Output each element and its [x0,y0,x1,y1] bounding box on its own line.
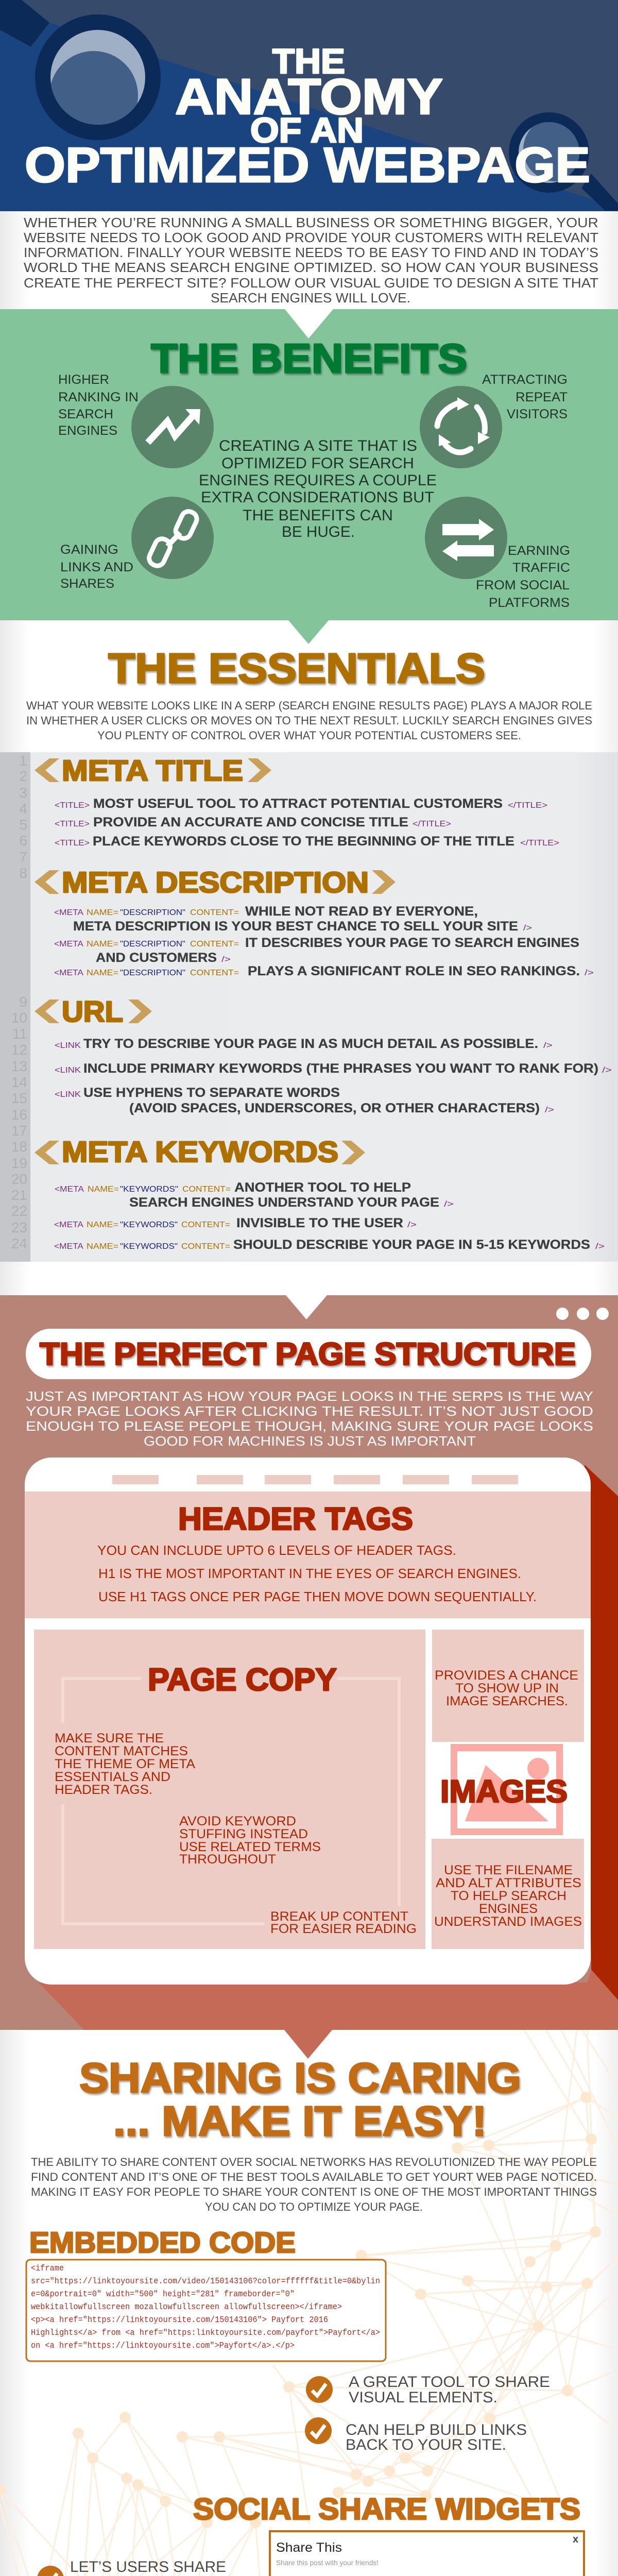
code box: Highlights</a> from <a href="https:linktoyoursite.com/payfort">Payfort</a> [31,2328,380,2338]
intro text: WORLD THE MEANS SEARCH ENGINE OPTIMIZED. SO HOW CAN YOUR BUSINESS [24,260,598,275]
meta description items: AND CUSTOMERS [96,951,217,965]
panel: page copy: ESSENTIALS AND [55,1770,170,1784]
meta title items: </TITLE> [508,801,547,810]
meta title items: </TITLE> [520,839,559,848]
meta title items: <TITLE> [55,820,90,828]
bullet: users share: LET’S USERS SHARE [70,2558,226,2575]
panel: the essentials intro [0,620,618,752]
meta description items: CONTENT= [190,969,239,977]
panel: images bottom text: ENGINES [479,1902,538,1916]
intro text: SEARCH ENGINES WILL LOVE. [211,290,410,306]
meta keywords items: ANOTHER TOOL TO HELP [234,1180,411,1195]
meta keywords items: NAME= [87,1242,118,1251]
meta keywords items: /> [444,1200,454,1209]
meta keywords items: <META [55,1185,84,1194]
benefit: social traffic: PLATFORMS [489,596,570,610]
line numbers: 20 [11,1171,27,1187]
intro text: WEBSITE NEEDS TO LOOK GOOD AND PROVIDE YOUR CUSTOMERS WITH RELEVANT [24,230,598,245]
meta description items: NAME= [87,940,118,948]
meta description items: /> [523,924,532,933]
code box: <iframe [31,2264,64,2274]
benefits centre text: THE BENEFITS CAN [243,507,393,524]
meta keywords items: "KEYWORDS" [120,1221,178,1229]
panel: page copy: THE THEME OF META [55,1757,195,1771]
bullet: build links [305,2417,527,2453]
line numbers: 18 [11,1139,27,1155]
meta keywords items: NAME= [87,1221,118,1229]
benefit: social traffic: EARNING [508,544,570,558]
benefit: higher ranking: HIGHER [58,372,109,387]
meta title items: </TITLE> [413,820,451,828]
line numbers: 10 [11,1010,27,1026]
line numbers: 14 [11,1074,27,1090]
meta description items: "DESCRIPTION" [120,940,185,948]
benefit: social traffic [425,497,570,610]
essentials text [26,699,592,742]
code box: src="https://linktoyoursite.com/video/150143106?color=ffffff&title=0&bylin [31,2277,380,2286]
spacer band [0,1262,618,1295]
meta keywords items: /> [407,1221,417,1229]
meta keywords items: SHOULD DESCRIBE YOUR PAGE IN 5-15 KEYWORDS [233,1238,590,1252]
line numbers: 11 [12,1026,27,1042]
meta title items: PROVIDE AN ACCURATE AND CONCISE TITLE [93,815,408,829]
window dots [556,1308,609,1320]
heading: url: URL [62,995,123,1028]
meta description items: NAME= [87,908,118,917]
essentials text: WHAT YOUR WEBSITE LOOKS LIKE IN A SERP (SEARCH ENGINE RESULTS PAGE) PLAYS A MAJOR ROLE [26,699,592,712]
sharing text: FIND CONTENT AND IT’S ONE OF THE BEST TOOLS AVAILABLE TO GET YOURT WEB PAGE NOTICED. [31,2171,597,2183]
heading: meta description: META DESCRIPTION [62,866,369,899]
heading pill: the perfect page structure: THE PERFECT PAGE STRUCTURE [40,1336,576,1371]
benefits centre text: ENGINES REQUIRES A COUPLE [199,472,437,489]
bullet: great tool: VISUAL ELEMENTS. [349,2389,497,2406]
panel: sharing is caring [0,2030,618,2576]
bullet: build links: CAN HELP BUILD LINKS [346,2421,527,2438]
meta description items: META DESCRIPTION IS YOUR BEST CHANCE TO SELL YOUR SITE [73,919,518,934]
meta title items: <TITLE> [55,801,90,810]
heading: sharing is caring: ... MAKE IT EASY! [113,2098,487,2145]
heading: url [35,995,152,1028]
line numbers: 6 [19,833,27,849]
url items: TRY TO DESCRIBE YOUR PAGE IN AS MUCH DETAIL AS POSSIBLE. [83,1037,538,1051]
share widget: x [573,2534,578,2545]
url items [55,1037,612,1115]
line numbers: 16 [11,1107,27,1123]
panel: images top text: TO SHOW UP IN [455,1681,559,1696]
heading: the benefits: THE BENEFITS [151,335,467,381]
url items: INCLUDE PRIMARY KEYWORDS (THE PHRASES YOU WANT TO RANK FOR) [83,1061,598,1076]
intro text: WHETHER YOU’RE RUNNING A SMALL BUSINESS OR SOMETHING BIGGER, YOUR [24,215,598,230]
meta description items: <META [54,908,83,917]
structure intro text: ENOUGH TO PLEASE PEOPLE THOUGH, MAKING SURE YOUR PAGE LOOKS [26,1418,593,1434]
line numbers: 22 [11,1203,27,1219]
url items: /> [602,1066,612,1075]
sharing text: THE ABILITY TO SHARE CONTENT OVER SOCIAL NETWORKS HAS REVOLUTIONIZED THE WAY PEOPLE [31,2156,597,2168]
meta description items: "DESCRIPTION" [120,908,185,917]
benefit: repeat visitors: REPEAT [516,390,568,404]
panel: code editor essentials [0,752,618,1262]
browser window [25,1458,591,1985]
code box [26,2260,386,2361]
line numbers: 4 [19,801,27,817]
meta title items: MOST USEFUL TOOL TO ATTRACT POTENTIAL CUSTOMERS [93,796,503,811]
nav bar blocks [112,1475,518,1484]
panel: page copy: PAGE COPY [148,1662,337,1697]
meta keywords items: <META [54,1242,83,1251]
meta keywords items: SEARCH ENGINES UNDERSTAND YOUR PAGE [129,1195,439,1210]
code box: on <a href="https://linktoyoursite.com">Payfort</a>.</p> [31,2341,295,2351]
heading pill: the perfect page structure [26,1329,591,1379]
sharing text: YOU CAN DO TO OPTIMIZE YOUR PAGE. [205,2200,423,2213]
panel: header tags: YOU CAN INCLUDE UPTO 6 LEVELS OF HEADER TAGS. [97,1543,456,1558]
benefit: higher ranking [58,372,214,468]
bullet: great tool [306,2374,550,2406]
meta description items: CONTENT= [190,908,239,917]
sharing text [31,2156,597,2213]
url items: <LINK [55,1041,81,1050]
meta keywords items: INVISIBLE TO THE USER [236,1216,403,1230]
panel: introduction [0,211,618,309]
panel: header tags: H1 IS THE MOST IMPORTANT IN THE EYES OF SEARCH ENGINES. [98,1566,521,1581]
icon: magnifying glass right [509,112,618,211]
header banner [0,0,618,211]
url items: (AVOID SPACES, UNDERSCORES, OR OTHER CHARACTERS) [129,1101,540,1115]
line numbers [11,753,27,1251]
meta keywords items [54,1180,605,1252]
meta description items: NAME= [87,969,118,977]
meta description items: /> [585,969,594,977]
share widget: Share This [276,2540,342,2555]
benefits centre text: EXTRA CONSIDERATIONS BUT [201,489,434,506]
panel: page copy: HEADER TAGS. [55,1783,152,1797]
meta description items: <META [54,969,83,977]
url items: USE HYPHENS TO SEPARATE WORDS [83,1086,340,1100]
heading: meta title: META TITLE [62,754,243,787]
benefit: links and shares: GAINING [60,543,118,557]
intro text [24,215,598,306]
intro text: CREATE THE PERFECT SITE? FOLLOW OUR VISUAL GUIDE TO DESIGN A SITE THAT [24,275,598,291]
heading: social share widgets: SOCIAL SHARE WIDGETS [193,2493,580,2526]
panel: images top text [432,1630,584,1742]
benefits centre text: CREATING A SITE THAT IS [219,437,417,454]
essentials text: YOU PLENTY OF CONTROL OVER WHAT YOUR POTENTIAL CUSTOMERS SEE. [97,729,521,742]
line numbers: 2 [19,768,27,784]
line numbers: 1 [19,753,27,769]
structure intro text: YOUR PAGE LOOKS AFTER CLICKING THE RESULT. IT’S NOT JUST GOOD [26,1403,593,1419]
code box: <p><a href="https://linktoyoursite.com/150143106"> Payfort 2016 [31,2315,328,2325]
benefit: higher ranking: ENGINES [58,423,117,438]
code box: webkitallowfullscreen mozallowfullscreen allowfullscreen></iframe> [31,2302,342,2312]
structure intro text: JUST AS IMPORTANT AS HOW YOUR PAGE LOOKS IN THE SERPS IS THE WAY [26,1388,593,1404]
icon: image placeholder with label [440,1744,568,1835]
url items: /> [545,1106,554,1114]
panel: page copy: USE RELATED TERMS [179,1840,321,1854]
panel: images top text: PROVIDES A CHANCE [435,1668,578,1683]
meta title items: PLACE KEYWORDS CLOSE TO THE BEGINNING OF THE TITLE [93,834,514,849]
benefit: repeat visitors: ATTRACTING [482,372,568,387]
structure intro text: GOOD FOR MACHINES IS JUST AS IMPORTANT [144,1433,476,1449]
intro text: INFORMATION. FINALLY YOUR WEBSITE NEEDS TO BE EASY TO FIND AND IN TODAY’S [24,245,598,260]
line numbers: 7 [19,849,27,865]
title: OF AN [250,111,364,150]
panel: header tags [25,1492,591,1618]
benefits centre text: BE HUGE. [282,523,355,540]
sharing text: MAKING IT EASY FOR PEOPLE TO SHARE YOUR CONTENT IS ONE OF THE MOST IMPORTANT THINGS [31,2185,597,2198]
line numbers: 21 [11,1187,27,1203]
line numbers: 12 [11,1042,27,1058]
benefit: links and shares: SHARES [60,577,114,591]
panel: images bottom text: TO HELP SEARCH [451,1889,566,1903]
line numbers: 8 [19,865,27,881]
meta title items: <TITLE> [55,839,90,848]
heading: sharing is caring: SHARING IS CARING [79,2055,521,2102]
meta description items: "DESCRIPTION" [120,969,185,977]
heading: sharing is caring [79,2055,521,2145]
meta keywords items: CONTENT= [181,1242,230,1251]
benefit: repeat visitors [420,372,568,468]
line numbers: 17 [11,1123,27,1139]
bullet: build links: BACK TO YOUR SITE. [346,2436,506,2453]
panel: page copy: FOR EASIER READING [270,1922,417,1936]
benefit: links and shares [60,497,214,591]
panel: page copy [34,1630,425,1949]
benefits centre text [199,437,437,540]
line numbers: 13 [11,1058,27,1074]
meta keywords items: CONTENT= [181,1221,230,1229]
icon: magnifying glass left [0,0,161,140]
benefit: repeat visitors: VISITORS [507,407,568,421]
heading: the essentials: THE ESSENTIALS [108,645,485,692]
bullet: great tool: A GREAT TOOL TO SHARE [349,2374,550,2391]
icon: image placeholder with label: IMAGES [440,1774,568,1809]
network background [0,2030,618,2576]
title [25,42,590,193]
url items: <LINK [55,1066,81,1075]
meta description items: /> [221,955,231,964]
share widget [270,2531,584,2576]
meta keywords items: <META [54,1221,83,1229]
line numbers: 9 [19,994,27,1010]
panel: page copy: THROUGHOUT [179,1852,276,1867]
panel: images bottom text: UNDERSTAND IMAGES [434,1914,582,1929]
meta keywords items: "KEYWORDS" [120,1242,178,1251]
line numbers: 15 [11,1090,27,1106]
meta description items: CONTENT= [190,940,239,948]
meta description items: <META [54,940,83,948]
share widget: Share this post with your friends! [276,2558,379,2567]
panel: the perfect page structure [0,1295,618,2030]
panel: page copy: BREAK UP CONTENT [270,1909,408,1924]
benefit: social traffic: TRAFFIC [512,561,570,575]
benefit: social traffic: FROM SOCIAL [476,578,570,592]
panel: page copy: STUFFING INSTEAD [179,1827,308,1841]
meta keywords items: CONTENT= [182,1185,231,1194]
url items: /> [543,1041,553,1050]
panel: images bottom text [432,1839,584,1949]
meta description items [54,904,594,978]
line numbers: 5 [19,817,27,833]
meta keywords items: /> [595,1242,605,1251]
meta description items: PLAYS A SIGNIFICANT ROLE IN SEO RANKINGS. [248,964,580,978]
structure intro text [26,1388,593,1449]
benefit: higher ranking: SEARCH [58,407,113,421]
meta description items: IT DESCRIBES YOUR PAGE TO SEARCH ENGINES [245,936,579,950]
code box: e=0&portrait=0" width="500" height="281" frameborder="0" [31,2290,295,2299]
meta keywords items: NAME= [88,1185,119,1194]
panel: page copy: MAKE SURE THE [55,1731,164,1745]
panel: images bottom text: USE THE FILENAME [444,1863,573,1877]
panel: images bottom text: AND ALT ATTRIBUTES [436,1876,581,1890]
panel: the benefits [0,309,618,620]
title: THE [272,42,345,81]
meta title items [55,796,559,849]
benefit: links and shares: LINKS AND [60,560,133,574]
line numbers: 23 [11,1219,27,1235]
essentials text: IN WHETHER A USER CLICKS OR MOVES ON TO THE NEXT RESULT. LUCKILY SEARCH ENGINES GIVES [26,714,592,727]
heading: meta keywords: META KEYWORDS [62,1136,338,1168]
title: OPTIMIZED WEBPAGE [25,138,590,193]
meta description items: WHILE NOT READ BY EVERYONE, [245,904,478,919]
heading: embedded code: EMBEDDED CODE [29,2226,296,2259]
benefits centre text: OPTIMIZED FOR SEARCH [221,455,414,472]
title: ANATOMY [175,69,443,125]
panel: page copy: AVOID KEYWORD [179,1814,296,1828]
panel: page copy: CONTENT MATCHES [55,1744,188,1758]
panel: header tags: USE H1 TAGS ONCE PER PAGE THEN MOVE DOWN SEQUENTIALLY. [98,1589,537,1604]
browser shadow [39,1465,618,2030]
url items: <LINK [55,1090,81,1099]
line numbers: 24 [11,1235,27,1251]
benefit: higher ranking: RANKING IN [58,390,139,404]
line numbers: 3 [19,785,27,801]
line numbers: 19 [11,1155,27,1171]
meta keywords items: "KEYWORDS" [120,1185,178,1194]
panel: header tags: HEADER TAGS [178,1501,413,1536]
panel: images top text: IMAGE SEARCHES. [446,1694,568,1708]
